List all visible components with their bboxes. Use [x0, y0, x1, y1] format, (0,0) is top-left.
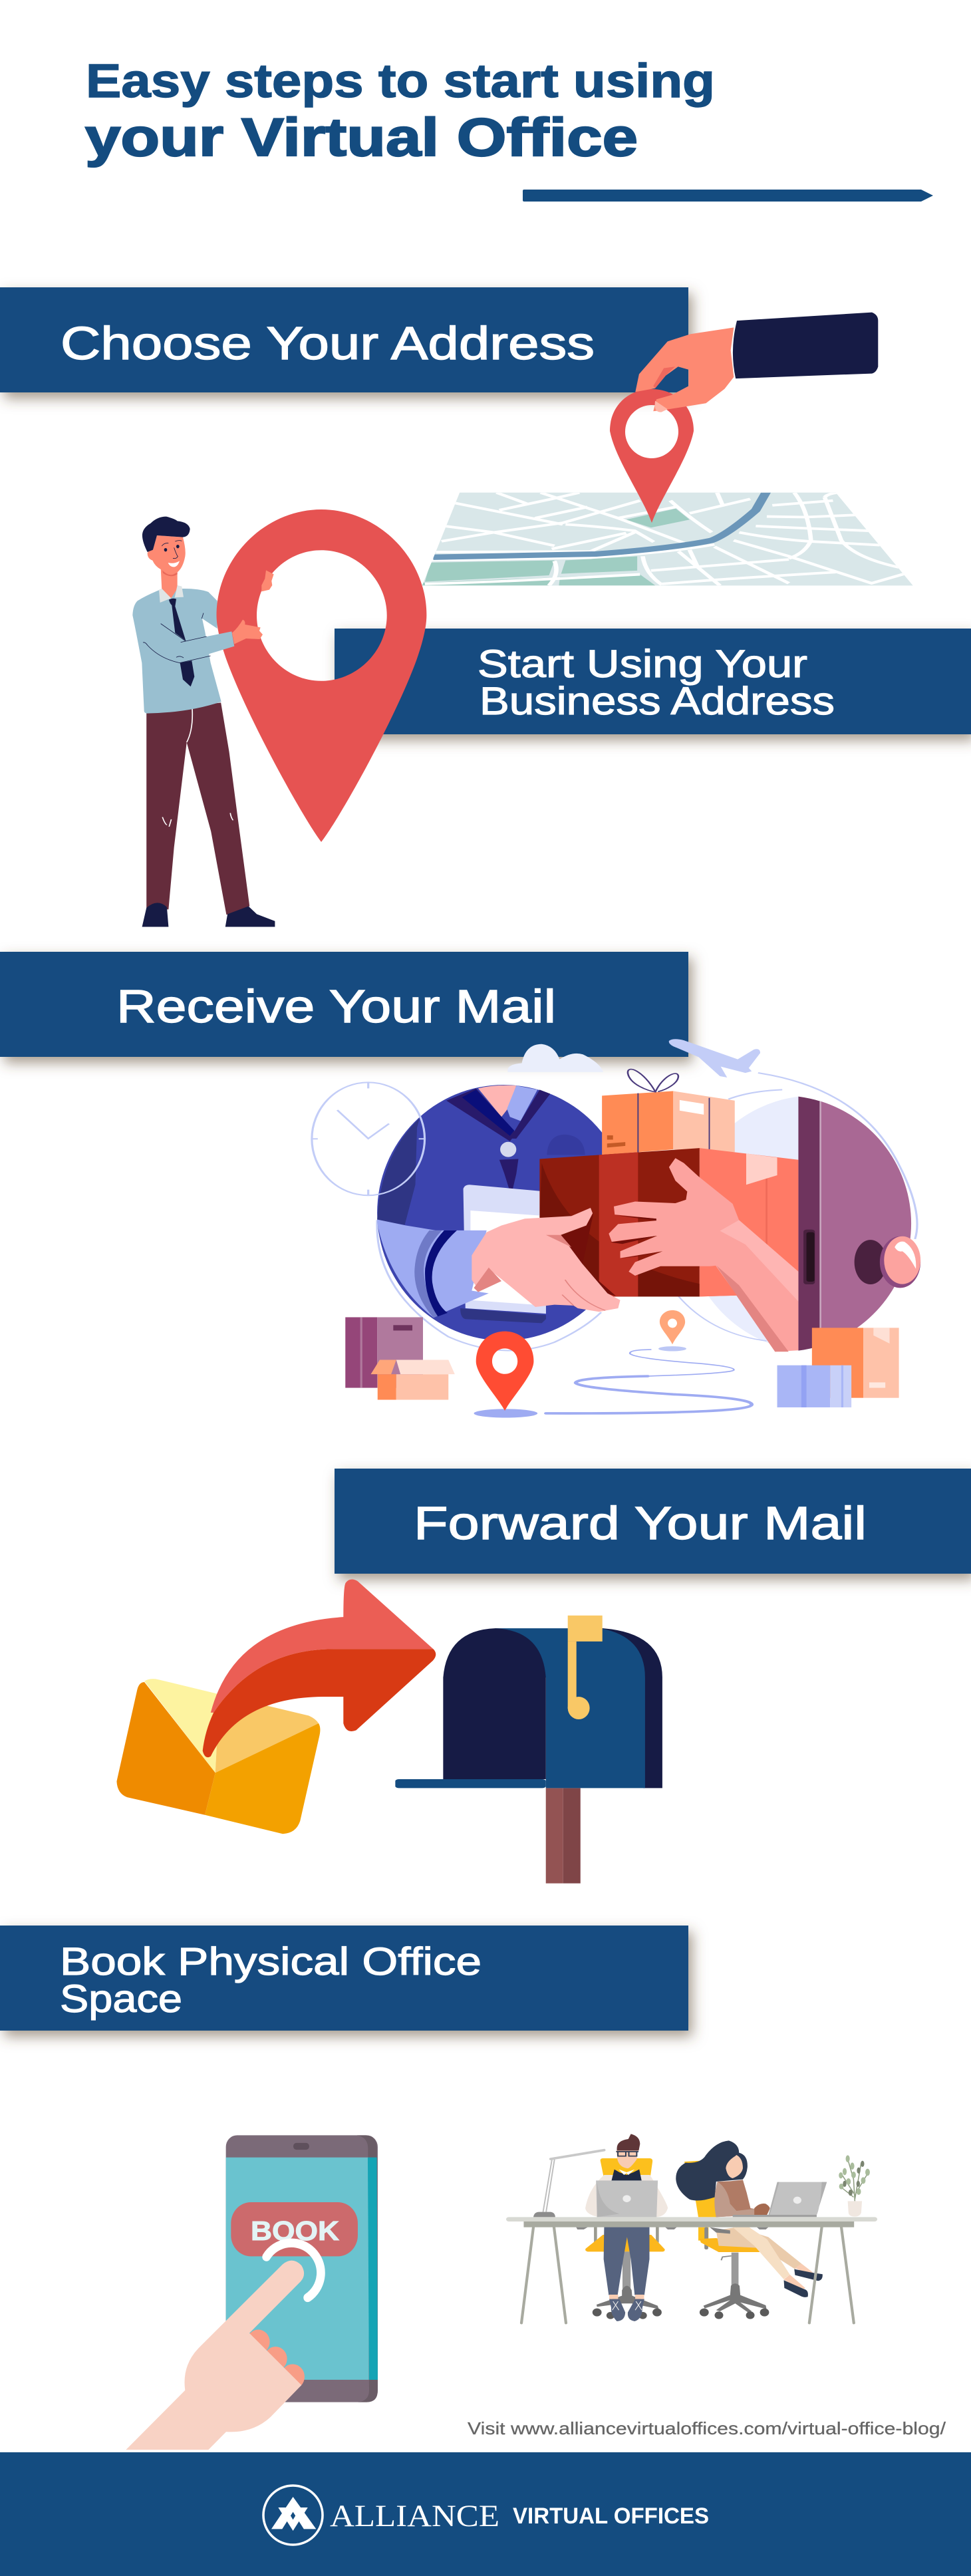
title	[85, 55, 715, 168]
small map pin	[610, 389, 694, 523]
illustration: man holding big map pin	[132, 509, 426, 927]
right hand and arm	[609, 1158, 798, 1352]
banner: choose your address	[0, 287, 688, 392]
banner: book physical office space	[0, 1926, 688, 2031]
book button	[231, 2202, 358, 2256]
banner: forward your mail	[335, 1469, 971, 1574]
footer band	[0, 2452, 971, 2576]
courier sleeve	[377, 1219, 489, 1318]
title: your Virtual Office	[85, 108, 638, 168]
title: Easy steps to start using	[86, 55, 715, 108]
arm and hands	[143, 570, 274, 663]
big map pin	[217, 509, 426, 842]
banner: start using your business address	[335, 629, 971, 734]
orange location pin	[658, 1310, 686, 1351]
door knob	[855, 1236, 920, 1288]
banner: forward your mail: Forward Your Mail	[414, 1497, 867, 1549]
phone	[226, 2135, 378, 2402]
boxes right	[777, 1328, 899, 1407]
left hand	[472, 1208, 621, 1312]
door	[798, 1097, 911, 1351]
lower body	[142, 702, 275, 927]
banner: book physical office space: Book Physical Office	[60, 1940, 482, 1983]
envelope	[116, 1679, 320, 1834]
hand	[635, 313, 878, 412]
banner: book physical office space: Space	[60, 1977, 182, 2021]
logo wordmark: VIRTUAL OFFICES	[513, 2504, 709, 2529]
logo mark	[263, 2486, 323, 2545]
title arrow rule	[523, 190, 933, 202]
mailbox	[395, 1616, 662, 1884]
illustration: hand tapping book on phone	[226, 2135, 378, 2402]
courier in blue	[377, 1085, 630, 1341]
boxes left	[345, 1317, 455, 1400]
source note: Visit www.alliancevirtualoffices.com/virtual-office-blog/	[468, 2418, 946, 2438]
woman in chair	[676, 2140, 827, 2319]
route line	[546, 1350, 752, 1413]
banner: start using your business address: Business Address	[480, 680, 835, 723]
illustration: envelope, arrow and mailbox	[116, 1580, 662, 1884]
airplane	[669, 1039, 760, 1077]
clock	[312, 1082, 425, 1196]
red location pin	[474, 1332, 537, 1417]
illustration: two people working at desk	[506, 2134, 877, 2323]
hand and tap ring	[126, 2243, 321, 2450]
illustration: parcel handover through door	[312, 1039, 920, 1417]
plant	[839, 2155, 870, 2217]
right circle behind door	[686, 1097, 798, 1351]
banner: start using your business address: Start Using Your	[478, 643, 807, 686]
logo wordmark: ALLIANCE	[330, 2499, 499, 2533]
desk	[506, 2217, 877, 2323]
big parcel	[539, 1070, 798, 1296]
forward arrow	[203, 1580, 436, 1757]
torso and head	[132, 517, 221, 714]
banner: receive your mail	[0, 952, 688, 1057]
cloud	[507, 1044, 603, 1072]
banner: choose your address: Choose Your Address	[61, 317, 595, 369]
orbit lines	[377, 1073, 917, 1351]
icon: hand holding small map pin	[610, 313, 878, 523]
lamp	[533, 2150, 604, 2217]
logo wordmark	[330, 2499, 709, 2533]
man in chair	[585, 2134, 668, 2321]
map illustration	[422, 491, 913, 585]
book button label: BOOK	[251, 2216, 339, 2246]
banner: receive your mail: Receive Your Mail	[116, 980, 556, 1032]
